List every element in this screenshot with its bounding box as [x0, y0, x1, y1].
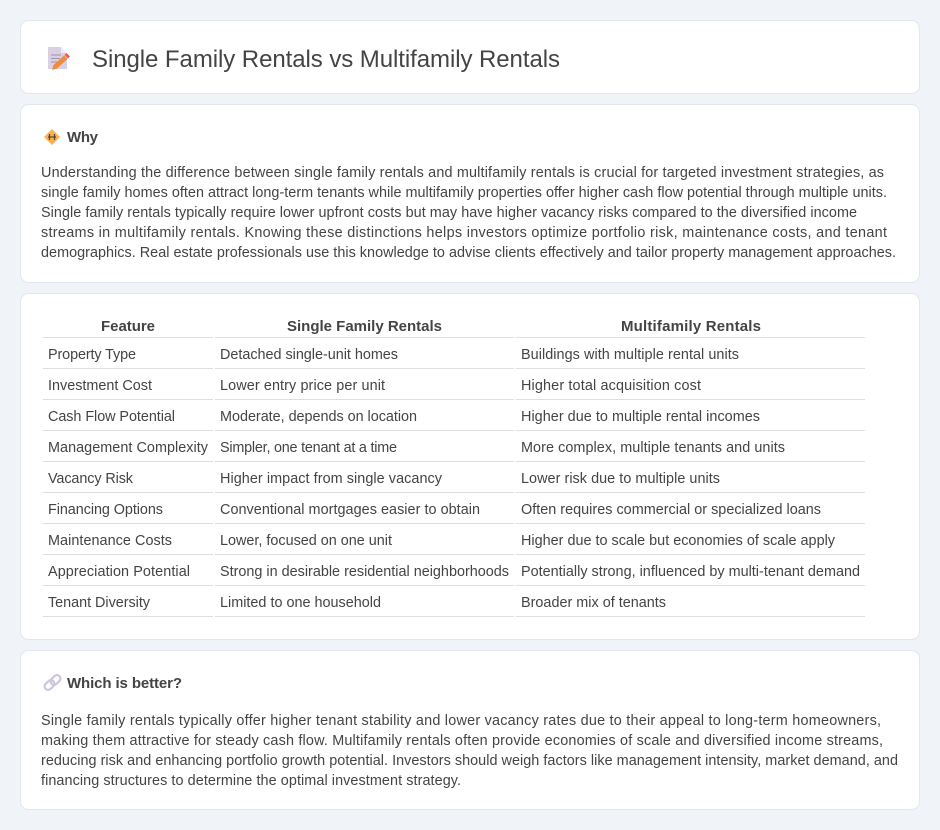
icon: document with pencil [48, 47, 70, 70]
row: management complexity: More complex, multiple tenants and units [521, 440, 785, 456]
row: management complexity [43, 440, 865, 462]
which is better paragraph: reducing risk and enhancing portfolio growth potential. Investors should weigh factors like management intensity, market demand, and [41, 753, 898, 769]
row: vacancy risk: Lower risk due to multiple units [521, 471, 720, 487]
panel: comparison table [20, 294, 920, 640]
table header [43, 318, 865, 338]
row: management complexity: Simpler, one tenant at a time [220, 440, 397, 456]
which is better paragraph: Single family rentals typically offer higher tenant stability and lower vacancy rates due to their appeal to long-term homeowners, [41, 713, 881, 729]
icon: chain link [43, 674, 62, 691]
row: financing options [43, 502, 865, 524]
row: property type: Detached single-unit homes [220, 347, 398, 363]
table header: Feature [101, 318, 155, 335]
row: investment cost [43, 378, 865, 400]
row: management complexity: Management Complexity [48, 440, 209, 456]
row: investment cost: Lower entry price per unit [220, 378, 385, 394]
why paragraph: streams in multifamily rentals. Knowing these distinctions helps investors optimize portfolio risk, maintenance costs, and tenant [41, 225, 887, 241]
why paragraph: Understanding the difference between single family rentals and multifamily rentals is crucial for targeted investment strategies, as [41, 165, 884, 181]
which is better paragraph: financing structures to determine the optimal investment strategy. [41, 773, 461, 789]
row: vacancy risk [43, 471, 865, 492]
row: financing options: Conventional mortgages easier to obtain [220, 502, 480, 518]
which is better paragraph [41, 713, 898, 789]
table header: Multifamily Rentals [621, 318, 761, 335]
panel: which is better [20, 650, 920, 810]
heading: why: Why [67, 129, 99, 146]
why paragraph: demographics. Real estate professionals use this knowledge to advise clients effectively and tailor property management approaches. [41, 245, 896, 261]
row: maintenance costs: Maintenance Costs [48, 533, 172, 549]
row: cash flow potential: Moderate, depends on location [220, 409, 417, 425]
why paragraph [41, 165, 896, 261]
row: financing options: Financing Options [48, 502, 163, 518]
row: financing options: Often requires commercial or specialized loans [521, 502, 821, 518]
row: property type: Buildings with multiple rental units [521, 347, 739, 363]
row: appreciation potential: Appreciation Potential [48, 564, 190, 580]
row: maintenance costs [43, 533, 865, 554]
row: appreciation potential: Potentially strong, influenced by multi-tenant demand [521, 564, 860, 580]
row: investment cost: Higher total acquisition cost [521, 378, 701, 394]
why paragraph: Single family rentals typically require lower upfront costs but may have higher vacancy risks compared to the diversified income [41, 205, 857, 221]
row: appreciation potential [43, 564, 865, 586]
row: tenant diversity: Broader mix of tenants [521, 595, 666, 611]
row: cash flow potential: Higher due to multiple rental incomes [521, 409, 760, 425]
row: cash flow potential [43, 409, 865, 430]
heading: which is better: Which is better? [67, 675, 182, 692]
row: maintenance costs: Lower, focused on one unit [220, 533, 392, 549]
row: tenant diversity: Limited to one household [220, 595, 381, 611]
row: property type: Property Type [48, 347, 136, 363]
row: vacancy risk: Higher impact from single vacancy [220, 471, 443, 487]
which is better paragraph: making them attractive for steady cash flow. Multifamily rentals often provide economies of scale and diversified income streams, [41, 733, 883, 749]
row: vacancy risk: Vacancy Risk [48, 471, 134, 487]
why paragraph: single family homes often attract long-term tenants while multifamily properties offer higher cash flow potential through multiple units. [41, 185, 887, 201]
row: property type [43, 347, 865, 368]
title text: Single Family Rentals vs Multifamily Rentals [92, 46, 560, 73]
icon: warning diamond [44, 129, 60, 145]
panel: why [20, 104, 920, 282]
row: cash flow potential: Cash Flow Potential [48, 409, 175, 425]
row: tenant diversity: Tenant Diversity [48, 595, 151, 611]
panel: title [20, 20, 920, 94]
row: maintenance costs: Higher due to scale but economies of scale apply [521, 533, 836, 549]
row: appreciation potential: Strong in desirable residential neighborhoods [220, 564, 509, 580]
table header: Single Family Rentals [287, 318, 442, 335]
row: tenant diversity [43, 595, 865, 616]
row: investment cost: Investment Cost [48, 378, 152, 394]
